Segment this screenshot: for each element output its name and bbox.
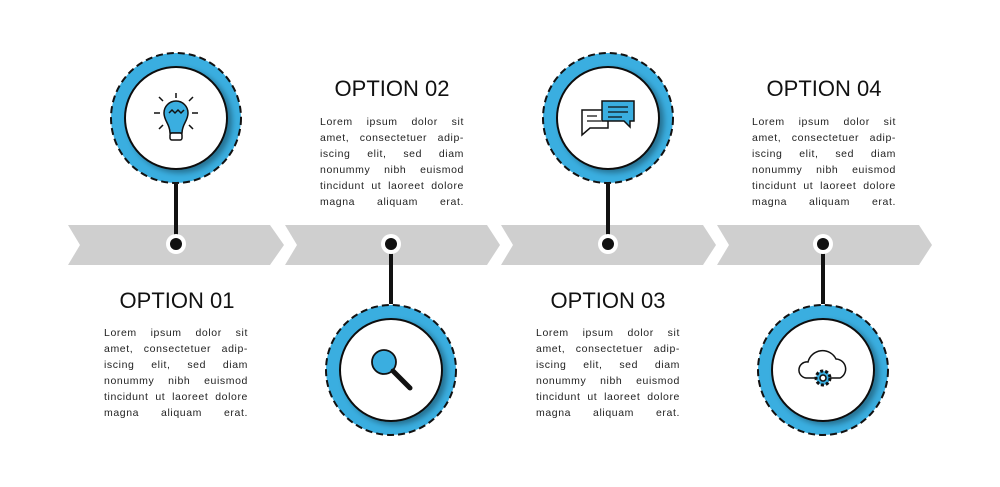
connector 4	[813, 234, 833, 304]
text: option 02 body: tincidunt ut laoreet dolore	[320, 180, 464, 192]
connector 1	[166, 184, 186, 254]
text: option 03 body: iscing elit, sed diam	[536, 359, 680, 371]
text: option 01 body: nonummy nibh euismod	[104, 375, 248, 387]
text: option 01 body: amet, consectetuer adip-	[104, 343, 248, 355]
timeline chevrons	[68, 225, 932, 265]
icon: chat bubbles	[582, 101, 634, 135]
text: option 01 body: magna aliquam erat.	[104, 407, 248, 419]
text: option 03 body	[536, 327, 680, 419]
text: option 01 body: tincidunt ut laoreet dolore	[104, 391, 248, 403]
text: option 01 body	[104, 327, 248, 419]
text: option 03 body: amet, consectetuer adip-	[536, 343, 680, 355]
text: option 04 body: tincidunt ut laoreet dolore	[752, 180, 896, 192]
text: option 03 body: Lorem ipsum dolor sit	[536, 327, 680, 339]
icon: cloud with gear	[799, 351, 846, 385]
text: option 02 body: magna aliquam erat.	[320, 196, 464, 208]
circle 2: magnifier	[326, 305, 456, 435]
text: option 03 body: nonummy nibh euismod	[536, 375, 680, 387]
title: option 02: OPTION 02	[335, 76, 449, 101]
text: option 04 body	[752, 116, 896, 208]
icon: lightbulb	[154, 93, 198, 140]
circle 1: lightbulb	[111, 53, 241, 183]
connector 2	[381, 234, 401, 304]
text: option 02 body: Lorem ipsum dolor sit	[320, 116, 464, 128]
circle 3: chat	[543, 53, 673, 183]
title: option 03: OPTION 03	[551, 288, 665, 313]
circle 4: cloud gear	[758, 305, 888, 435]
text: option 02 body: iscing elit, sed diam	[320, 148, 464, 160]
text: option 02 body	[320, 116, 464, 208]
text: option 02 body: amet, consectetuer adip-	[320, 132, 464, 144]
text: option 01 body: Lorem ipsum dolor sit	[104, 327, 248, 339]
text: option 04 body: magna aliquam erat.	[752, 196, 896, 208]
text: option 04 body: Lorem ipsum dolor sit	[752, 116, 896, 128]
text: option 03 body: tincidunt ut laoreet dolore	[536, 391, 680, 403]
text: option 04 body: iscing elit, sed diam	[752, 148, 896, 160]
text: option 02 body: nonummy nibh euismod	[320, 164, 464, 176]
text: option 04 body: nonummy nibh euismod	[752, 164, 896, 176]
text: option 03 body: magna aliquam erat.	[536, 407, 680, 419]
title: option 01: OPTION 01	[120, 288, 234, 313]
text: option 01 body: iscing elit, sed diam	[104, 359, 248, 371]
title: option 04: OPTION 04	[767, 76, 881, 101]
text: option 04 body: amet, consectetuer adip-	[752, 132, 896, 144]
icon: magnifier	[372, 350, 410, 388]
connector 3	[598, 184, 618, 254]
